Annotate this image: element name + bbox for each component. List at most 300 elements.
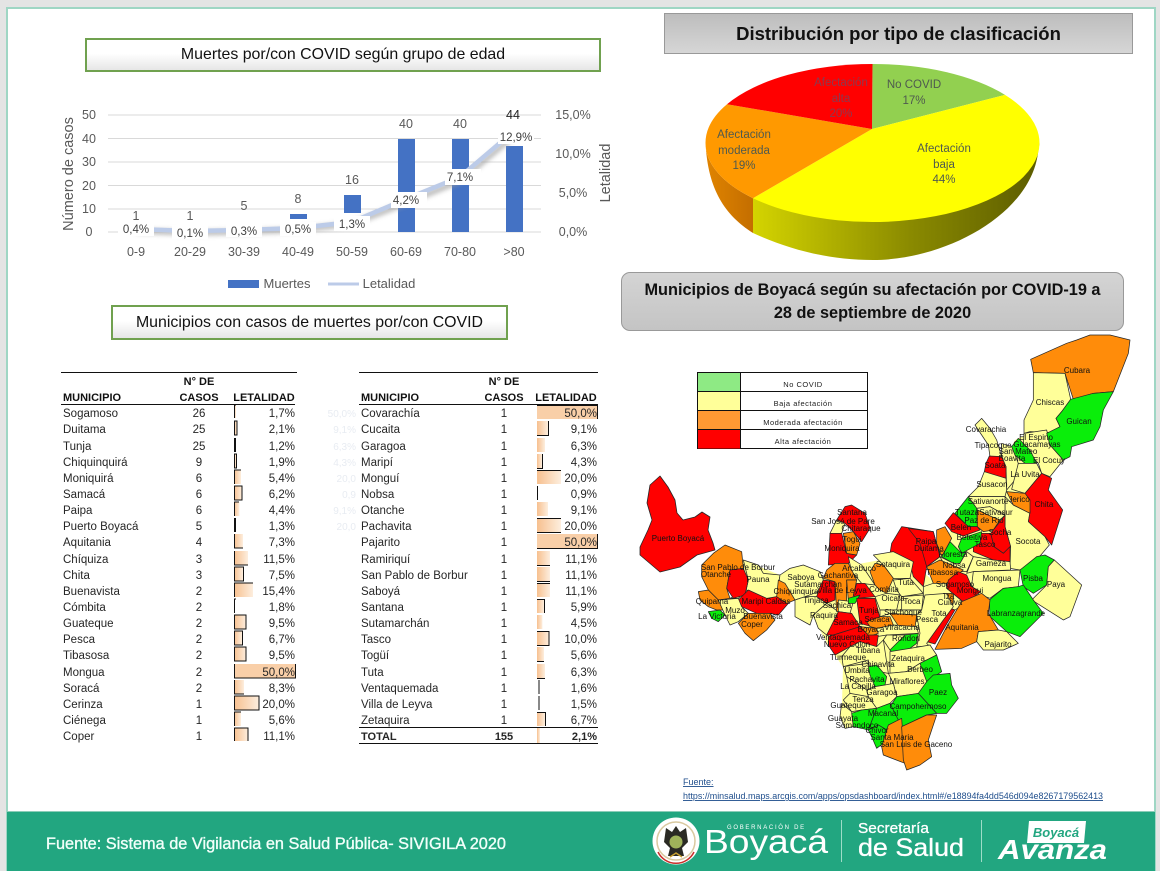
y axis right labels: 5,0% <box>559 186 587 200</box>
map labels: Chitaraque <box>841 524 881 533</box>
table 2 rows: Cucaita <box>361 424 401 436</box>
table 2 rows: 9,1% <box>571 505 597 517</box>
map labels: Buenavista <box>743 612 783 621</box>
table 2 rows: Otanche <box>361 505 404 517</box>
x axis labels: 40-49 <box>282 245 314 259</box>
table 1 rows: 4 <box>196 537 203 549</box>
source link <box>683 777 1103 801</box>
table 2 faint ghost values: 0,9 <box>342 490 356 501</box>
title: age group chart: Muertes por/con COVID según grupo de edad <box>181 46 505 63</box>
table 2 rows: 1 <box>501 457 507 469</box>
table 2 faint ghost values: 4,3% <box>333 458 356 469</box>
table 2 rows: Santana <box>361 602 404 614</box>
legend: Muertes <box>264 276 311 291</box>
table 2 rows: 2,1% <box>572 731 597 743</box>
table 2 rows: 4,5% <box>571 618 597 630</box>
table 2 rows: 1 <box>501 521 507 533</box>
map: filler under municipalities <box>738 435 1040 713</box>
map labels: Toca <box>904 597 921 606</box>
y axis left labels: 0 <box>86 225 93 239</box>
map labels: Guateque <box>830 701 866 710</box>
data labels: deaths: 1 <box>133 209 140 223</box>
table 2 rows: Tuta <box>361 667 384 679</box>
table 1 rows: 15,4% <box>262 586 295 598</box>
map labels: Susacon <box>976 480 1008 489</box>
map labels: Cuitiva <box>938 598 963 607</box>
table 2 rows: 20,0% <box>564 473 597 485</box>
map labels: Otanche <box>701 570 732 579</box>
table 2 faint ghost values: 9,1% <box>333 506 356 517</box>
table 2 faint ghost values: 6,3% <box>333 442 356 453</box>
pie labels: No COVID <box>887 79 941 91</box>
map labels: Tibasosa <box>926 568 959 577</box>
line: lethality <box>136 131 514 231</box>
map labels: Tibana <box>856 646 881 655</box>
table 1 rows: 2 <box>196 634 202 646</box>
table 1 rows: 6 <box>196 473 202 485</box>
table 2 rows: 11,1% <box>565 570 597 582</box>
map labels: Sutamarchan <box>794 580 842 589</box>
table 1 rows: 1 <box>196 715 202 727</box>
map labels: Tunja <box>859 606 879 615</box>
map labels: Campohermoso <box>890 702 947 711</box>
table 2 rows: 9,1% <box>571 424 597 436</box>
table 2 faint ghost values: 20,0 <box>337 474 356 485</box>
slice: no covid <box>872 64 1005 129</box>
map labels: Saboya <box>787 573 815 582</box>
map labels: Sotaquira <box>876 560 911 569</box>
data labels: lethality: 12,9% <box>500 132 532 144</box>
map labels: Boavita <box>999 454 1026 463</box>
map labels: Mongua <box>983 574 1012 583</box>
pie labels: 17% <box>902 95 926 107</box>
table 1 rows: Buenavista <box>63 586 121 598</box>
table 1 rows: 6 <box>196 505 202 517</box>
x axis labels: 70-80 <box>444 245 476 259</box>
line: lethality shadow <box>136 136 514 233</box>
map: western region <box>640 476 715 572</box>
map labels: Siachoque <box>884 608 922 617</box>
footer band <box>7 811 1155 871</box>
pie labels: Afectación <box>917 143 971 155</box>
table 2 rows: 5,9% <box>571 602 597 614</box>
table 2 rows: Ramiriquí <box>361 554 411 566</box>
map labels: Sachica <box>823 601 852 610</box>
table 2 rows: 1 <box>501 715 507 727</box>
table 1 rows: 25 <box>193 424 205 436</box>
map labels: Pachavita <box>849 675 885 684</box>
map labels: Berbeo <box>907 665 933 674</box>
table 2 rows <box>361 408 597 743</box>
data labels: deaths: 8 <box>295 192 302 206</box>
map labels: Chita <box>1035 500 1054 509</box>
table 2 rows: Monguí <box>361 473 400 485</box>
table 2 rows: Togüí <box>361 650 390 662</box>
logo: crest <box>652 818 700 864</box>
map labels: Santa Maria <box>870 733 914 742</box>
y axis left labels: 10 <box>82 202 96 216</box>
table 1 header: CASOS <box>179 392 219 404</box>
map legend: Alta afectación <box>775 437 831 446</box>
table 1 rows: Cerinza <box>63 699 103 711</box>
map labels: Coper <box>741 620 763 629</box>
map labels: Floresta <box>939 550 968 559</box>
table 2 rows: 11,1% <box>565 586 597 598</box>
legend: Letalidad <box>363 276 415 291</box>
table 1 rows: 3 <box>196 570 202 582</box>
table 2 rows: 1 <box>501 602 507 614</box>
table 2 rows: 1,6% <box>571 683 597 695</box>
logo: Gobernación de Boyacá: GOBERNACIÓN DE <box>727 824 806 831</box>
data labels: deaths: 1 <box>187 209 194 223</box>
map legend: Moderada afectación <box>763 418 843 427</box>
x axis labels: 0-9 <box>127 245 145 259</box>
map labels: Oicata <box>881 594 905 603</box>
table 1 rows: Moniquirá <box>63 473 114 485</box>
map labels: Boyaca <box>858 625 885 634</box>
map labels: Covarachia <box>966 425 1007 434</box>
table 1 rows: 7,5% <box>269 570 295 582</box>
axis title: cases: Número de casos <box>61 117 77 231</box>
table 1 rows: Pesca <box>63 634 96 646</box>
map labels: San Pablo de Borbur <box>701 563 775 572</box>
table 1 header: LETALIDAD <box>233 392 295 404</box>
pie side walls <box>753 143 1040 260</box>
table 2 rows: 50,0% <box>564 408 597 420</box>
table 2 rows: Zetaquira <box>361 715 410 727</box>
table 2 rows: 50,0% <box>564 537 597 549</box>
map labels: Pajarito <box>984 640 1012 649</box>
pie labels: Afectación <box>717 129 771 141</box>
table 2 rows: 20,0% <box>564 521 597 533</box>
map labels: Tenza <box>852 695 874 704</box>
map labels: Maripi Caldas <box>742 597 790 606</box>
title: map: 28 de septiembre de 2020 <box>774 304 971 322</box>
table 1 rows: 11,5% <box>263 554 295 566</box>
slice: moderate <box>706 104 872 198</box>
table 2 rows: Garagoa <box>361 441 406 453</box>
table 2 rows: 1 <box>501 424 507 436</box>
data labels: lethality: 4,2% <box>393 195 419 207</box>
table 1 rows <box>63 408 295 743</box>
map labels: Raquira <box>810 611 839 620</box>
table 1 rows: Soracá <box>63 683 100 695</box>
logo: Secretaría de Salud: de Salud <box>858 834 964 862</box>
table 2 rows: 1 <box>501 650 507 662</box>
map labels: Viracacha <box>884 623 920 632</box>
table 1 rows: 1,9% <box>269 457 295 469</box>
map labels: Moniquira <box>824 544 860 553</box>
table 2 rows: 1 <box>501 634 507 646</box>
map labels: Cubara <box>1064 366 1091 375</box>
data labels: lethality: 0,4% <box>123 224 149 236</box>
map labels: Arcabuco <box>842 564 876 573</box>
table 1 rows: 1,2% <box>269 441 295 453</box>
map labels: Mongui <box>957 586 983 595</box>
pie labels <box>717 77 971 186</box>
map labels: Beteitiva <box>957 533 988 542</box>
map labels: Tasco <box>975 540 996 549</box>
table 1 header: MUNICIPIO <box>63 392 122 404</box>
table 1 rows: 5,4% <box>269 473 295 485</box>
map labels: Turmeque <box>830 653 867 662</box>
pie labels: Afectación <box>814 77 868 89</box>
table 2 faint ghost values: 9,1% <box>333 425 356 436</box>
map labels: Combita <box>869 585 899 594</box>
table 2 rows: 1 <box>501 570 507 582</box>
table 1 rows: 9,5% <box>269 650 295 662</box>
table 2 rows: 10,0% <box>564 634 597 646</box>
slice: low <box>753 95 1040 222</box>
table 1 rows: Aquitania <box>63 537 112 549</box>
data labels: deaths: 16 <box>345 173 359 187</box>
table 2 rows: Nobsa <box>361 489 395 501</box>
table 2 rows: 11,1% <box>565 554 597 566</box>
map labels: Chiscas <box>1036 398 1064 407</box>
table 2: municipalities <box>328 372 598 744</box>
data labels: lethality: 0,3% <box>231 226 257 238</box>
table 2 rows: Ventaquemada <box>361 683 439 695</box>
table 1 rows: 2 <box>196 667 202 679</box>
data labels: lethality: 7,1% <box>447 172 473 184</box>
map labels: Paipa <box>916 537 937 546</box>
map labels: San José de Pare <box>811 517 875 526</box>
table 2 rows: 0,9% <box>571 489 597 501</box>
table 2 faint ghost values <box>328 409 356 533</box>
table 2 rows: 1 <box>501 473 507 485</box>
table 1 rows: 8,3% <box>269 683 295 695</box>
map labels: Chivor <box>865 726 889 735</box>
map: southern and western municipalities <box>698 505 958 770</box>
y axis left labels: 50 <box>82 108 96 122</box>
table 1 header <box>63 376 295 404</box>
table 1 rows: Chita <box>63 570 90 582</box>
table 1 data bars <box>234 405 296 741</box>
map legend: Baja afectación <box>774 399 832 408</box>
table 1 rows: Puerto Boyacá <box>63 521 139 533</box>
map labels: Umbita <box>844 666 870 675</box>
table 2 rows: Pachavita <box>361 521 412 533</box>
map labels: Rondon <box>892 634 920 643</box>
table 1 rows: Tunja <box>63 441 92 453</box>
table 2 header <box>361 376 597 404</box>
table 1 rows: Cómbita <box>63 602 106 614</box>
table 2 rows: 1 <box>501 667 507 679</box>
map labels: Labranzagrande <box>987 609 1046 618</box>
map labels: Socota <box>1016 537 1041 546</box>
table 1 rows: Sogamoso <box>63 408 118 420</box>
table 2 rows: 1 <box>501 408 507 420</box>
logo: Secretaría de Salud: Secretaría <box>858 821 930 837</box>
table 2 rows: 155 <box>495 731 513 743</box>
map labels: Quipama <box>696 597 729 606</box>
title: pie chart: Distribución por tipo de clasificación <box>736 22 1061 44</box>
map labels: Puerto Boyacá <box>652 534 705 543</box>
table 1: municipalities <box>61 372 297 743</box>
table 2 rows: Saboyá <box>361 586 401 598</box>
map labels: Villa de Leyva <box>817 586 867 595</box>
table 2 header: N° DE <box>489 376 519 388</box>
logo: Boyacá Avanza: Avanza <box>997 834 1107 865</box>
map labels: Guayata <box>828 714 859 723</box>
pie labels: 44% <box>932 174 956 186</box>
map labels: Gachantiva <box>818 571 859 580</box>
table 1 rows: 1 <box>196 731 202 743</box>
pie labels: 19% <box>732 160 756 172</box>
map: northern region <box>890 335 1130 650</box>
map labels: Muzo <box>725 606 745 615</box>
map labels: Aquitania <box>945 623 979 632</box>
map labels: El Cocuy <box>1033 456 1065 465</box>
map labels: Pauna <box>746 575 770 584</box>
map labels: Nuevo Colon <box>824 640 870 649</box>
map labels: Paz de Rio <box>964 516 1004 525</box>
map labels: La Uvita <box>1010 470 1040 479</box>
map labels: Sativanorte <box>968 497 1009 506</box>
data labels: deaths: 40 <box>399 117 413 131</box>
table 1 rows: 7,3% <box>269 537 295 549</box>
table 2 rows: Covarachía <box>361 408 420 420</box>
table 1 rows: 50,0% <box>262 667 295 679</box>
table 2 rows: 1 <box>501 618 507 630</box>
map labels: Iza <box>944 592 955 601</box>
map labels: Soraca <box>864 615 890 624</box>
x axis labels: 60-69 <box>390 245 422 259</box>
table 1 rows: 6,2% <box>269 489 295 501</box>
map labels: San Luis de Gaceno <box>880 740 953 749</box>
map labels: Tota <box>931 609 947 618</box>
table 2 rows: 1,5% <box>571 699 597 711</box>
table 1 rows: 1,7% <box>269 408 295 420</box>
table 1 rows: Duitama <box>63 424 106 436</box>
table 2 data bars <box>537 405 598 743</box>
data labels: deaths <box>133 108 520 223</box>
y axis right labels: 10,0% <box>555 147 591 161</box>
table 2 rows: Maripí <box>361 457 394 469</box>
table 2 faint ghost values: 20,0 <box>337 522 356 533</box>
data labels: deaths: 44 <box>506 108 520 122</box>
data labels: lethality: 1,3% <box>339 219 365 231</box>
table 2 rows: 1 <box>501 505 507 517</box>
combo chart: deaths and lethality by age <box>61 108 614 291</box>
map of Boyacá municipalities <box>640 335 1130 770</box>
table 1 rows: 20,0% <box>262 699 295 711</box>
title: municipalities table: Municipios con casos de muertes por/con COVID <box>136 314 483 330</box>
table 2 rows: Pajarito <box>361 537 400 549</box>
table 1 rows: 2 <box>196 618 202 630</box>
table 1 rows: Chíquiza <box>63 554 109 566</box>
pie labels: alta <box>832 93 851 105</box>
logo: Gobernación de Boyacá: Boyacá <box>704 823 829 860</box>
y axis left labels: 20 <box>82 179 96 193</box>
table 1 rows: 2 <box>196 683 202 695</box>
table 2 rows: 1 <box>501 586 507 598</box>
table 1 rows: 1 <box>196 699 202 711</box>
map labels <box>652 366 1092 749</box>
table 1 rows: 5 <box>196 521 202 533</box>
map labels: Tinjaca <box>803 596 829 605</box>
map labels: Chinavita <box>861 660 895 669</box>
title: municipalities table <box>111 305 508 340</box>
table 2 rows: Tasco <box>361 634 391 646</box>
table 1 rows: 5,6% <box>269 715 295 727</box>
map legend: No COVID <box>783 380 823 389</box>
map labels: Somondoco <box>836 721 879 730</box>
map labels: Guacamayas <box>1013 440 1061 449</box>
map labels: Soata <box>985 461 1006 470</box>
table 2 rows: 1 <box>501 699 507 711</box>
table 2 rows: San Pablo de Borbur <box>361 570 468 582</box>
map labels: Santana <box>837 508 867 517</box>
legend <box>228 276 415 291</box>
y axis left labels: 40 <box>82 132 96 146</box>
table 1 rows: 2,1% <box>269 424 295 436</box>
table 2 rows: 6,3% <box>571 667 597 679</box>
map labels: Duitama <box>914 544 944 553</box>
pie labels: baja <box>933 159 955 171</box>
x axis labels: >80 <box>503 245 525 259</box>
source link: https://minsalud.maps.arcgis.com/apps/opsdashboard/index.html#/e18894fa4dd546d094e8267179562413 <box>683 791 1103 801</box>
title: age group chart <box>85 38 601 72</box>
map labels: Miraflores <box>889 677 925 686</box>
table 2 rows: Villa de Leyva <box>361 699 433 711</box>
x axis labels: 30-39 <box>228 245 260 259</box>
table 2 rows: 5,6% <box>571 650 597 662</box>
map labels: Socha <box>989 528 1012 537</box>
source link: Fuente: <box>683 777 714 787</box>
table 1 rows: Coper <box>63 731 94 743</box>
pie chart: classification distribution <box>706 64 1040 260</box>
table 1 rows: 9 <box>196 457 202 469</box>
map labels: Nobsa <box>942 561 966 570</box>
data labels: lethality: 0,1% <box>177 228 203 240</box>
table 1 rows: Mongua <box>63 667 105 679</box>
slice: high <box>727 64 872 129</box>
logo: Secretaría de Salud <box>858 821 964 862</box>
map labels: Belen <box>951 523 971 532</box>
table 1 rows: 6 <box>196 489 202 501</box>
title: map: Municipios de Boyacá según su afectación por COVID-19 a <box>644 280 1100 298</box>
table 2 rows: 1 <box>501 554 507 566</box>
table 1 rows: Samacá <box>63 489 106 501</box>
map labels: Ventaquemada <box>816 633 870 642</box>
table 1 rows: 4,4% <box>269 505 295 517</box>
table 1 rows: 2 <box>196 650 202 662</box>
table 1 rows: 11,1% <box>263 731 295 743</box>
map labels: Guican <box>1066 417 1092 426</box>
map labels: La Capilla <box>840 682 876 691</box>
y axis right labels <box>555 108 591 239</box>
map labels: Jerico <box>1008 495 1030 504</box>
table 1 rows: 9,5% <box>269 618 295 630</box>
y axis right labels: 15,0% <box>555 108 591 122</box>
table 2 header: CASOS <box>484 392 524 404</box>
map labels: Togui <box>842 535 862 544</box>
table 2 header: MUNICIPIO <box>361 392 420 404</box>
table 1 rows: 3 <box>196 554 202 566</box>
map labels: Paya <box>1047 580 1066 589</box>
map labels: Pesca <box>916 615 939 624</box>
table 1 rows: Tibasosa <box>63 650 110 662</box>
map labels: Garagoa <box>866 688 898 697</box>
map labels: Sativasur <box>979 508 1013 517</box>
table 1 rows: Guateque <box>63 618 114 630</box>
table 1 rows: Chiquinquirá <box>63 457 128 469</box>
axis title: lethality: Letalidad <box>598 144 614 202</box>
table 2 rows: Sutamarchán <box>361 618 429 630</box>
y axis left labels: 30 <box>82 155 96 169</box>
data labels: lethality: 0,5% <box>285 224 311 236</box>
